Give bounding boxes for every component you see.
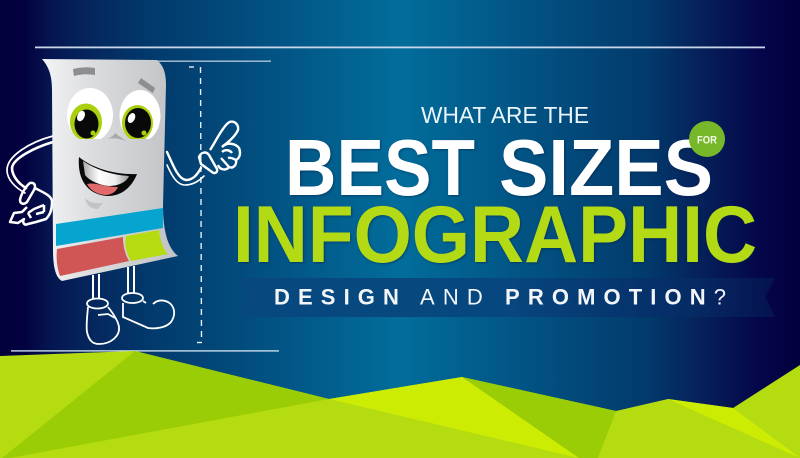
ribbon subtitle: DESIGN AND PROMOTION ? [274, 284, 726, 310]
heading: best sizes [285, 123, 713, 212]
mouth [79, 157, 137, 196]
right shoe [122, 293, 174, 328]
bright right facet [668, 399, 800, 458]
chin [85, 198, 103, 209]
heading: best sizes: BEST [285, 123, 475, 212]
bottom rule line [11, 350, 279, 352]
left eye [67, 88, 113, 142]
left hand [10, 183, 52, 225]
dark center facet [462, 377, 616, 458]
green block [125, 230, 168, 261]
mascot character [7, 59, 240, 344]
heading: what are the: WHAT ARE THE [421, 102, 589, 128]
blue band [56, 208, 163, 246]
left shoe [87, 298, 119, 344]
left arm [7, 136, 53, 193]
right pointing hand [199, 122, 240, 173]
right eye [120, 90, 160, 142]
dark left facet [2, 351, 329, 458]
nose [107, 133, 126, 141]
heading: best sizes: SIZES [499, 123, 713, 212]
bright center facet [329, 377, 579, 458]
paper body [42, 59, 178, 281]
heading: infographic: INFOGRAPHIC [233, 190, 757, 280]
mountain landscape [0, 351, 800, 458]
eyebrows [73, 67, 155, 93]
mountain base [0, 351, 800, 458]
badge: for [689, 121, 725, 157]
badge: for: FOR [697, 134, 717, 146]
right arm [167, 152, 204, 185]
height dimension marker [189, 67, 202, 342]
ribbon banner [235, 278, 775, 317]
top rule line [35, 46, 765, 48]
second rule line [150, 60, 271, 62]
red block [57, 237, 129, 276]
legs [93, 266, 134, 299]
